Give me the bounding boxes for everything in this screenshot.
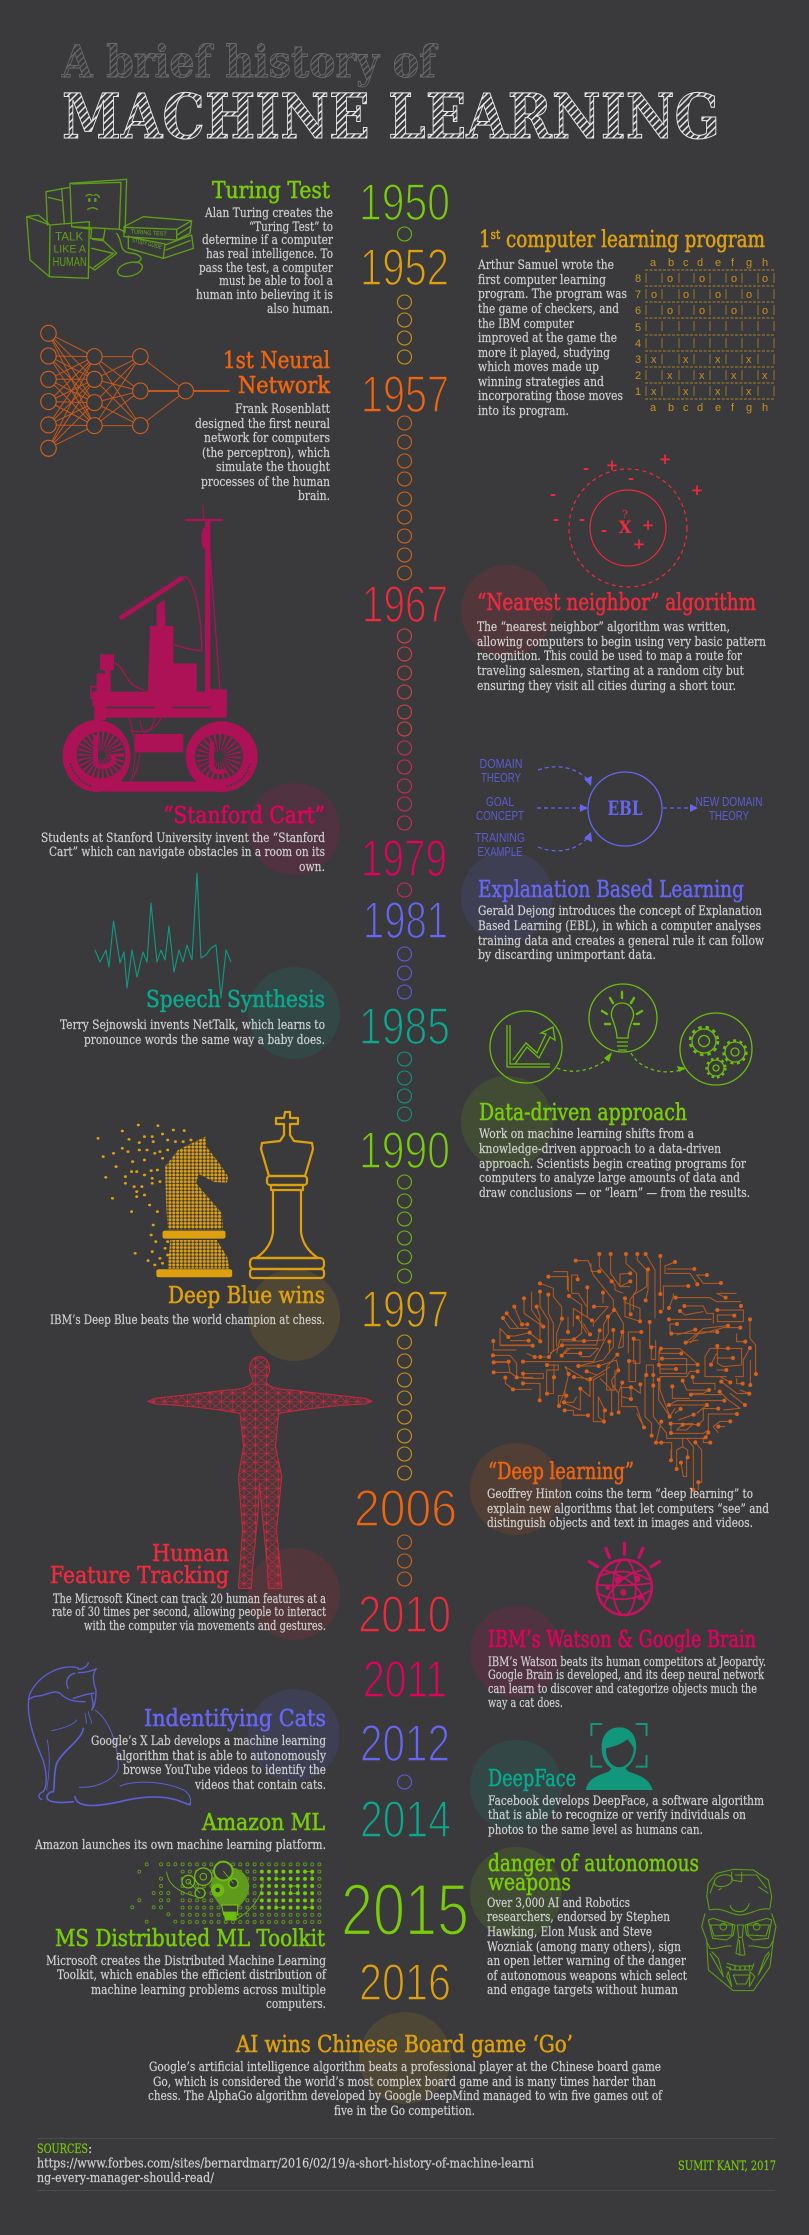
panel: 1st Neural Network — [41, 325, 331, 504]
body text: Cart” which can navigate obstacles in a room on its — [49, 845, 325, 860]
icon: EBL diagram: NEW DOMAIN — [696, 794, 762, 809]
icon: dissolving knight — [96, 1124, 232, 1277]
chart: checkers board: o — [731, 305, 737, 317]
chart: checkers board: x — [651, 354, 657, 366]
sources url: ng-every-manager-should-read/ — [37, 2171, 215, 2186]
body text — [195, 402, 331, 504]
sources url — [37, 2142, 534, 2186]
panel: Nearest neighbor — [477, 450, 767, 694]
body text: The “nearest neighbor” algorithm was written, — [477, 620, 730, 635]
year 1957: 1957 — [361, 366, 449, 424]
year 1990: 1990 — [359, 1122, 450, 1180]
credit: SUMIT KANT, 2017 — [678, 2159, 776, 2174]
chart: checkers board: o — [699, 273, 705, 285]
sources url: https://www.forbes.com/sites/bernardmarr/2016/02/19/a-short-history-of-machine-learni — [37, 2156, 534, 2172]
chart: checkers board: x — [667, 370, 673, 382]
body text: Over 3,000 AI and Robotics — [487, 1896, 630, 1911]
chart: checkers board: x — [715, 354, 721, 366]
panel: 1st computer learning program — [477, 227, 774, 419]
body text: winning strategies and — [478, 375, 604, 390]
heading: Speech Synthesis — [146, 987, 325, 1013]
heading: Human — [152, 1541, 229, 1567]
body text — [41, 831, 325, 875]
chart: checkers board: 1 — [635, 386, 641, 398]
chart: checkers board: 3 — [635, 354, 641, 366]
body text: Hawking, Elon Musk and Steve — [487, 1925, 652, 1940]
body text — [148, 2060, 663, 2119]
chart: checkers board: o — [762, 273, 768, 285]
panel: Turing Test — [27, 178, 334, 317]
icon: computer and books: TURING TEST — [131, 229, 167, 238]
body text — [477, 620, 767, 694]
body text: processes of the human — [201, 475, 331, 490]
chart: checkers board: x — [683, 386, 689, 398]
chart: checkers board: o — [715, 289, 721, 301]
chart: checkers board: b — [668, 257, 674, 269]
panel: IBM's Watson & Google Brain — [488, 1543, 766, 1711]
chart: checkers board: x — [651, 386, 657, 398]
timeline — [341, 174, 469, 2012]
icon: computer and books: LIKE A — [53, 244, 87, 256]
panel: Deep learning — [487, 1254, 769, 1531]
sources label: SOURCES — [37, 2142, 88, 2157]
chart: checkers board: x — [746, 354, 752, 366]
icon: king chess piece — [250, 1112, 324, 1278]
footer — [37, 2138, 776, 2190]
icon: sound wave — [95, 873, 231, 998]
icon: EBL diagram: THEORY — [481, 770, 521, 785]
panel: Indentifying Cats — [28, 1663, 327, 1805]
chart: checkers board: x — [746, 386, 752, 398]
body text: designed the first neural — [195, 417, 330, 432]
chart: checkers board — [635, 257, 774, 414]
year 2016: 2016 — [359, 1954, 451, 2012]
heading: Amazon ML — [201, 1810, 325, 1836]
body text: Frank Rosenblatt — [235, 402, 331, 417]
chart: checkers board: o — [746, 289, 752, 301]
body text: videos that contain cats. — [194, 1778, 326, 1793]
heading — [50, 1541, 229, 1589]
icon: EBL diagram: GOAL — [486, 794, 514, 809]
heading: Turing Test — [212, 178, 331, 204]
icon: EBL diagram: EBL — [608, 796, 642, 820]
body text: of autonomous weapons which select — [487, 1969, 688, 1984]
panel: Explanation Based Learning — [475, 756, 764, 963]
icon: wireframe human figure — [148, 1357, 372, 1588]
body text — [488, 1794, 764, 1838]
body text — [478, 904, 764, 963]
icon: nearest neighbor diagram: ? — [622, 508, 628, 521]
icon: nearest neighbor diagram: + — [659, 450, 671, 468]
body text: improved at the game the — [478, 331, 617, 346]
icon: nearest neighbor diagram: - — [579, 510, 585, 528]
chart: checkers board: 6 — [635, 305, 641, 317]
body text: computers. — [266, 1997, 326, 2012]
body text: an open letter warning of the danger — [487, 1954, 687, 1969]
panel: DeepFace — [488, 1724, 764, 1838]
body text: Arthur Samuel wrote the — [477, 258, 614, 273]
title line 1: A brief history of — [61, 37, 439, 88]
body text: also human. — [267, 302, 333, 317]
chart: checkers board: o — [699, 305, 705, 317]
icon: EBL diagram: DOMAIN — [480, 756, 522, 771]
icon: face recognition — [586, 1724, 653, 1790]
chart: checkers board: o — [683, 289, 689, 301]
panel: MS Distributed ML Toolkit — [46, 1861, 327, 2012]
year 1981: 1981 — [363, 892, 448, 950]
body text: simulate the thought — [216, 460, 331, 475]
panel: danger of autonomous weapons — [487, 1851, 776, 1998]
icon: robot skull — [702, 1869, 776, 1991]
chart: checkers board: x — [762, 370, 768, 382]
heading: Explanation Based Learning — [478, 877, 744, 903]
body text: human into believing it is — [196, 288, 333, 303]
year 2006: 2006 — [354, 1480, 457, 1538]
body text: Wozniak (among many others), sign — [487, 1940, 682, 1955]
chart: checkers board: c — [683, 402, 689, 414]
heading — [488, 1851, 699, 1896]
chart: checkers board: a — [650, 402, 657, 414]
chart: checkers board: f — [731, 402, 735, 414]
body text: program. The program was — [478, 287, 627, 302]
chart: checkers board: x — [683, 354, 689, 366]
body text: chess. The AlphaGo algorithm developed by Google DeepMind managed to win five games out of — [148, 2089, 663, 2104]
body text — [479, 1127, 750, 1201]
chart: checkers board: d — [697, 257, 703, 269]
chart: checkers board: c — [683, 257, 689, 269]
chart: checkers board: x — [699, 370, 705, 382]
panel: Stanford Cart — [41, 505, 325, 875]
body text: Amazon launches its own machine learning platform. — [34, 1838, 326, 1853]
icon: computer and books: STUDY GUIDE — [131, 238, 162, 251]
chart: checkers board: h — [762, 402, 768, 414]
icon: nearest neighbor diagram — [550, 450, 703, 587]
icon: cat outline — [28, 1663, 191, 1805]
chart: checkers board: o — [667, 273, 673, 285]
heading — [223, 348, 331, 399]
chart: checkers board: e — [715, 402, 721, 414]
icon: data to insight to gears — [490, 984, 752, 1085]
icon: Watson globe — [589, 1543, 659, 1615]
year 2012: 2012 — [360, 1715, 450, 1773]
chart: checkers board: 7 — [635, 289, 641, 301]
body text: the IBM computer — [478, 317, 575, 332]
body text: (the perceptron), which — [202, 446, 331, 461]
icon: EBL diagram: CONCEPT — [476, 808, 524, 823]
body text: brain. — [298, 489, 330, 504]
heading: DeepFace — [488, 1766, 576, 1792]
body text: draw conclusions — or “learn” — from the results. — [479, 1186, 750, 1201]
heading: Network — [238, 373, 331, 399]
body text: photos to the same level as humans can. — [488, 1823, 703, 1838]
body text: knowledge-driven approach to a data-driven — [479, 1142, 722, 1157]
body text: traveling salesmen, starting at a random city but — [477, 664, 745, 679]
body text — [487, 1896, 688, 1998]
chart: checkers board: g — [746, 257, 752, 269]
icon: nearest neighbor diagram: - — [550, 485, 556, 503]
chart: checkers board: o — [731, 273, 737, 285]
body text: more it played, studying — [478, 346, 610, 361]
chart: checkers board: 4 — [635, 338, 641, 350]
body text — [60, 1018, 325, 1048]
body text: which moves made up — [478, 360, 599, 375]
heading: 1st Neural — [223, 348, 330, 374]
body text: with the computer via movements and gestures. — [84, 1619, 326, 1634]
body text: Geoffrey Hinton coins the term “deep learning” to — [487, 1487, 753, 1502]
body text: Google’s X Lab develops a machine learning — [91, 1734, 326, 1749]
body text — [46, 1954, 327, 2012]
year 2015: 2015 — [341, 1870, 469, 1951]
panel: Human Feature Tracking — [50, 1357, 372, 1634]
body text: and engage targets without human — [487, 1983, 679, 1998]
heading: Data-driven approach — [479, 1100, 687, 1126]
heading: danger of autonomous — [488, 1851, 699, 1877]
panel: AI wins Go — [148, 2032, 663, 2119]
body text: five in the Go competition. — [334, 2104, 475, 2119]
chart: checkers board: f — [731, 257, 735, 269]
year 1967: 1967 — [362, 576, 448, 634]
icon: nearest neighbor diagram: + — [633, 535, 645, 553]
body text: Students at Stanford University invent the “Stanford — [41, 831, 325, 846]
body text: distinguish objects and text in images and videos. — [487, 1516, 753, 1531]
icon: circuit brain — [493, 1254, 756, 1490]
icon: computer and books: HUMAN — [53, 255, 87, 269]
chart: checkers board: 5 — [635, 322, 641, 334]
body text — [488, 1655, 766, 1711]
title line 2: MACHINE LEARNING — [62, 80, 720, 153]
soft accent circles — [248, 565, 562, 2104]
icon: nearest neighbor diagram: - — [601, 521, 607, 539]
heading: MS Distributed ML Toolkit — [55, 1926, 326, 1952]
icon: Stanford cart silhouette — [63, 505, 258, 792]
chart: checkers board: a — [650, 257, 657, 269]
body text: pass the test, a computer — [199, 261, 334, 276]
body text: must be able to fool a — [219, 274, 333, 289]
body text: machine learning problems across multiple — [91, 1983, 326, 1998]
body text: own. — [299, 860, 325, 875]
body text: the game of checkers, and — [478, 302, 619, 317]
body text — [91, 1734, 327, 1793]
chart: checkers board: b — [668, 402, 674, 414]
heading: weapons — [488, 1870, 571, 1896]
heading: 1 — [479, 227, 494, 253]
body text: researchers, endorsed by Stephen — [487, 1910, 670, 1925]
body text: Terry Sejnowski invents NetTalk, which learns to — [60, 1018, 325, 1033]
chart: checkers board: 2 — [635, 370, 641, 382]
year 2011: 2011 — [363, 1651, 447, 1709]
chart: checkers board: o — [762, 305, 768, 317]
panel: Deep Blue wins — [50, 1112, 325, 1328]
icon: nearest neighbor diagram: + — [606, 456, 618, 474]
body text: way a cat does. — [488, 1696, 563, 1711]
icon: nearest neighbor diagram: - — [583, 459, 589, 477]
icon: dotted lightbulb with gears — [131, 1861, 322, 1925]
body text: Work on machine learning shifts from a — [479, 1127, 694, 1142]
year 2010: 2010 — [358, 1586, 451, 1644]
body text: pronounce words the same way a baby does. — [84, 1033, 325, 1048]
panel: Speech Synthesis — [60, 873, 325, 1048]
body text: into its program. — [478, 404, 569, 419]
icon: EBL diagram: EXAMPLE — [478, 844, 523, 859]
body text: The Microsoft Kinect can track 20 human features at a — [53, 1592, 326, 1607]
body text — [196, 206, 334, 317]
body text: first computer learning — [478, 273, 606, 288]
body text: Microsoft creates the Distributed Machine Learning — [46, 1954, 326, 1969]
body text: incorporating those moves — [478, 389, 623, 404]
body text — [52, 1592, 327, 1634]
heading: Indentifying Cats — [144, 1706, 326, 1732]
body text: by discarding unimportant data. — [478, 948, 656, 963]
icon: EBL diagram — [475, 756, 762, 859]
body text: Google’s artificial intelligence algorithm beats a professional player at the Chinese board game — [149, 2060, 661, 2075]
heading: Deep Blue wins — [168, 1283, 325, 1309]
body text: IBM’s Deep Blue beats the world champion at chess. — [50, 1313, 325, 1328]
year 1985: 1985 — [359, 998, 450, 1056]
panel: Data-driven approach — [479, 984, 752, 1201]
body text: “Turing Test” to — [249, 220, 333, 235]
body text — [477, 258, 627, 419]
body text: ensuring they visit all cities during a short tour. — [477, 679, 736, 694]
icon: EBL diagram: THEORY — [709, 808, 749, 823]
body text: Go, which is considered the world’s most complex board game and is many times harder than — [153, 2075, 657, 2090]
body text: that is able to recognize or verify individuals on — [488, 1808, 747, 1823]
body text: has real intelligence. To — [206, 247, 333, 262]
chart: checkers board: d — [697, 402, 703, 414]
chart: checkers board: x — [715, 386, 721, 398]
body text: approach. Scientists begin creating programs for — [479, 1157, 747, 1172]
icon: nearest neighbor diagram: X — [618, 518, 632, 538]
body text: Alan Turing creates the — [204, 206, 333, 221]
year 1979: 1979 — [361, 830, 447, 888]
icon: computer and books — [27, 179, 193, 279]
chart: checkers board: h — [762, 257, 768, 269]
body text: Toolkit, which enables the efficient distribution of — [57, 1968, 327, 1983]
icon: EBL diagram: TRAINING — [475, 830, 525, 845]
icon: neural network — [41, 325, 230, 456]
icon: nearest neighbor diagram: + — [691, 481, 703, 499]
year 1950: 1950 — [359, 174, 450, 232]
chart: checkers board: 8 — [635, 273, 641, 285]
heading: st — [491, 228, 501, 243]
title — [61, 37, 720, 153]
heading: Feature Tracking — [50, 1563, 229, 1589]
icon: nearest neighbor diagram: - — [553, 510, 559, 528]
year 1997: 1997 — [361, 1281, 449, 1339]
sources url: : — [88, 2142, 92, 2157]
body text: browse YouTube videos to identify the — [123, 1763, 326, 1778]
chart: checkers board: g — [746, 402, 752, 414]
body text: algorithm that is able to autonomously — [116, 1749, 327, 1764]
body text: rate of 30 times per second, allowing people to interact — [52, 1605, 327, 1620]
heading: “Stanford Cart” — [163, 803, 325, 829]
panel: Amazon ML — [34, 1810, 326, 1853]
icon: nearest neighbor diagram: + — [642, 516, 654, 534]
icon: nearest neighbor diagram: - — [628, 469, 634, 487]
body text: recognition. This could be used to map a route for — [477, 649, 743, 664]
heading: “Deep learning” — [488, 1459, 634, 1485]
chart: checkers board: o — [651, 289, 657, 301]
year 1952: 1952 — [360, 239, 449, 297]
body text: computers to analyze large amounts of data and — [479, 1171, 740, 1186]
timeline dots — [398, 227, 412, 1789]
year 2014: 2014 — [360, 1791, 451, 1849]
chart: checkers board: o — [667, 305, 673, 317]
body text: determine if a computer — [202, 233, 334, 248]
body text — [487, 1487, 769, 1531]
icon: computer and books: TALK — [55, 230, 83, 244]
heading: AI wins Chinese Board game ‘Go’ — [235, 2032, 573, 2058]
chart: checkers board: x — [731, 370, 737, 382]
chart: checkers board: e — [715, 257, 721, 269]
body text: network for computers — [204, 431, 330, 446]
